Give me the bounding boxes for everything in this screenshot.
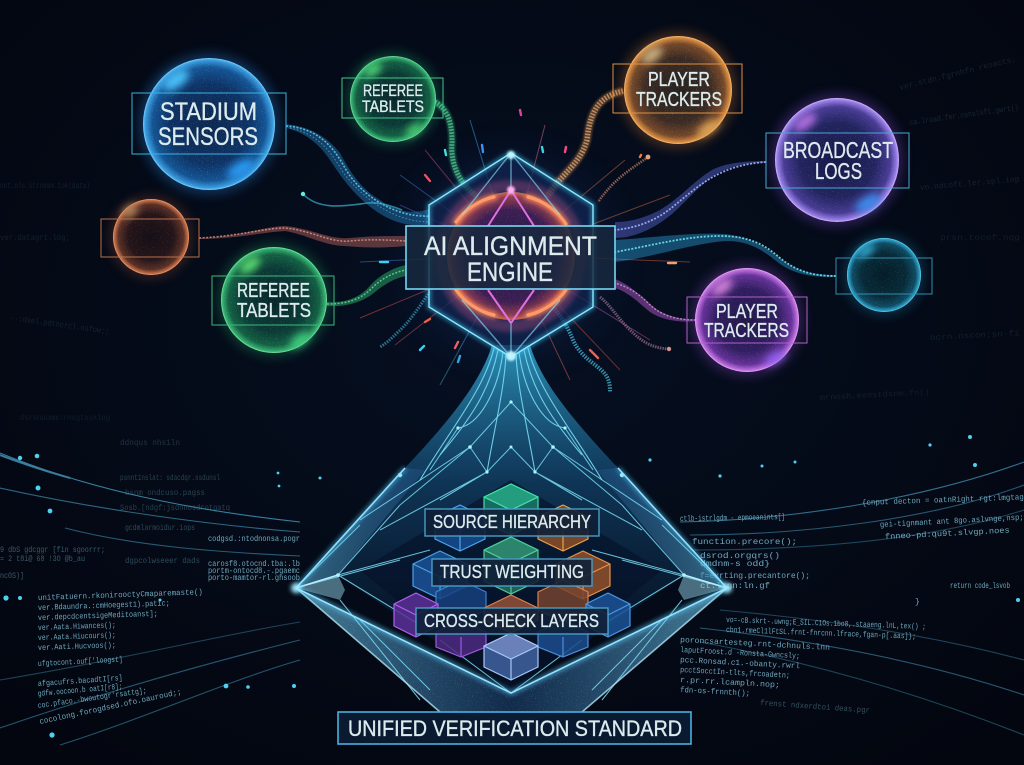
left code text: ver.Aata.Hiwances(); (38, 621, 116, 633)
cube blue low (538, 620, 588, 657)
left code text: porto-mamtor-rl.ghsoob (208, 574, 300, 583)
crystal fan lines (420, 348, 602, 480)
engine ring arcs (456, 197, 566, 315)
label: cross-check layers: CROSS-CHECK LAYERS (424, 610, 599, 631)
sphere: referee tablets left: TABLETS (237, 300, 311, 322)
sphere: stadium sensors: SENSORS (158, 123, 258, 151)
sphere: referee tablets top (342, 53, 443, 145)
sphere: player trackers right: PLAYER (716, 301, 778, 323)
right code text: fnneo-pd:qu9t.slvgp.noes (885, 526, 1010, 542)
engine label: AI ALIGNMENT (424, 231, 597, 261)
left code text: 9 dbS gdcggr [fin sgoorrr; (0, 546, 105, 555)
right code text: cbn1.rmeCl1lFtSL.frnt-fnrcnn.lfrace,fgan-p[.aas]}; (726, 626, 916, 642)
sphere: player trackers top (613, 32, 742, 148)
engine label (406, 226, 615, 289)
cube blue upper left (435, 505, 485, 551)
strand: lower left (380, 292, 430, 347)
right code text: r.pr.rr.lcampln.nop; (680, 676, 780, 690)
strand: player trackers top (547, 91, 623, 197)
left code text: carosf8.otocnd.tba:.lb (208, 560, 300, 569)
sphere: referee tablets left (212, 244, 334, 356)
left flowing light lines (0, 453, 300, 745)
left code text: unitFatuern.rkonirooctyCmaparemaste() (38, 588, 203, 603)
engine label: ENGINE (467, 257, 553, 287)
right code text: function.precore(); (692, 538, 797, 547)
strand: thin teal (301, 192, 402, 210)
crystal nodes (336, 400, 686, 577)
left code text: bsnm ondcuso.pagss (125, 489, 205, 498)
central glow (376, 120, 646, 390)
sparks (380, 110, 676, 362)
right code text: } (915, 598, 920, 607)
right code text: pcc.Ronsad.c1.-obanty.rwrl (680, 656, 800, 671)
sphere: player trackers top: PLAYER (648, 69, 710, 91)
left code text: portm-ontocd8.-.pgaemc (208, 567, 300, 576)
left code text: ver.Bdaundra.:cmHoegest1).patic; (38, 599, 170, 613)
left code text: cocolong.forogdsed.ofo.oauroud;; (39, 688, 182, 727)
cube blue mid far left (413, 551, 467, 599)
ai alignment engine core (406, 151, 615, 361)
cube purple left (394, 593, 438, 637)
strand: lower pink (600, 297, 671, 351)
right code text: pcctSocctIn-tlts,frcoadetn; (680, 666, 790, 681)
data strands (199, 91, 836, 392)
right code text: dsrod.orgqrs() (700, 552, 780, 561)
left code text: ufgtocont.ouf['loogst] (38, 656, 123, 669)
left code text: ddnqus nhs1ln (120, 439, 180, 448)
crystal central beam (510, 357, 512, 765)
left code text: ver.datagrt.log; (0, 234, 70, 243)
left code text: coc.pfaco.-bwoutogr'rsattg]; (37, 687, 147, 711)
left code text: Sosb.[ndgf:jsdnnosdrotgatq (120, 504, 230, 513)
sphere: stadium sensors: STADIUM (160, 98, 257, 126)
right code text: dmdnm-s odd} (700, 560, 770, 569)
sphere: player trackers right (687, 264, 807, 376)
right flowing light lines (680, 462, 1024, 735)
right code text: ct.lrgn:ln.gf (700, 582, 770, 591)
cube large bottom (484, 633, 538, 680)
cube blue mid (436, 580, 486, 622)
left code text: psnnt1nslat: sdacdqr.ssdunsl (120, 474, 220, 483)
left code text: gcdmlarmoidur.iops (125, 524, 195, 533)
sphere: small blue (836, 235, 932, 315)
cube blue right (586, 593, 630, 637)
strand: lower right (545, 300, 610, 392)
right code text: fdn-os-frnnth(); (680, 686, 750, 699)
strand: referee tablets top (435, 102, 478, 197)
right code text (680, 55, 1024, 716)
sphere: small orange (101, 196, 199, 278)
label: source hierarchy (425, 509, 599, 536)
sphere: stadium sensors (132, 54, 286, 194)
left code text: nc0S)] (0, 572, 24, 581)
right code text: vo=-cB.skrt-.uwng;E_SIL.C1Os.1bo8,.staaeng.lnL,tex() ; (726, 616, 926, 632)
left code text: dgpcolwseeer dads (125, 557, 200, 566)
left code text: ont.ols.strneam.tok(data) (0, 182, 90, 191)
right code text: mrnosh.eenstdsnm.fn() (820, 388, 930, 403)
right code text: f=exrting.precantore(); (700, 572, 810, 581)
crystal upper fan (296, 345, 727, 693)
funnel: verification crystal (291, 345, 732, 765)
cube purple low (436, 620, 486, 657)
verification cubes (394, 484, 630, 680)
data particles (3, 435, 1020, 738)
left code text: afgacufrs.bacadtI[rs] (38, 674, 123, 689)
sphere: referee tablets top: REFEREE (363, 82, 423, 100)
engine hexagon fill (429, 153, 593, 357)
left code text: ver.depcdcentsigeMeditoanst]; (38, 610, 158, 623)
engine ring (447, 192, 575, 320)
left code text: codgsd.:ntodnonsa.pogr (208, 535, 300, 544)
left code text: ver.Aati.Hucvoos(); (38, 641, 116, 653)
left code text: --:dsel.pdtncrcl.nsfow;; (10, 314, 110, 337)
sphere: player trackers top: TRACKERS (636, 89, 722, 111)
left code text: dsrsnuumm:rnsgtasklng (20, 414, 110, 423)
sphere: broadcast logs: BROADCAST (783, 137, 893, 163)
engine ring glow (441, 186, 581, 326)
cube orange low (484, 595, 538, 633)
sphere: broadcast logs (766, 94, 909, 226)
cube orange mid right (538, 580, 588, 622)
cube green top (484, 484, 538, 535)
right code text: ocrn.nscon;sn-fi (930, 329, 1020, 343)
right code text: laputFroost.d -Ronsta-Gwncsly; (680, 646, 800, 661)
right code text: vo.ndcoft.ler.spl.iop (919, 175, 1020, 193)
right code text: ver.stdn.fgrnhfn rkoacts; (899, 55, 1017, 93)
strand: player trackers right (615, 279, 696, 322)
right code text: prsn.tocof.nqg (940, 234, 1020, 243)
left code text: gdfw.oocoon.b oatI[r8]; (37, 683, 123, 699)
label: cross-check layers (416, 608, 608, 634)
cube green middle (484, 537, 538, 594)
strand: stadium sensors (286, 124, 430, 225)
strand: thin orange (598, 155, 650, 202)
cube orange upper right (538, 505, 588, 551)
label: source hierarchy: SOURCE HIERARCHY (433, 511, 591, 532)
label: unified verification standard: UNIFIED VERIFICATION STANDARD (348, 716, 682, 741)
crystal inner shade (360, 480, 662, 693)
strand: broadcast logs (615, 161, 766, 238)
bright crystal edges (296, 468, 727, 712)
radiating light rays (360, 120, 690, 385)
strand: small blue sphere (615, 234, 836, 277)
left code text (0, 182, 300, 727)
right code text: frenst ndxerdtoi deas.pgr (760, 699, 870, 716)
left code text: ver.Aata.Hiucours(); (38, 631, 116, 643)
crystal side facets (296, 468, 425, 588)
sphere: player trackers right: TRACKERS (704, 320, 789, 342)
engine hexagon lines (429, 153, 593, 357)
strand: referee tablets left (327, 265, 406, 306)
sphere: broadcast logs: LOGS (815, 158, 862, 184)
sphere: referee tablets top: TABLETS (362, 98, 424, 116)
left code text: = 2 t8i@ 68 !3O @b_au (0, 555, 85, 564)
crystal mesh (296, 402, 727, 700)
crystal lower speckle (296, 588, 511, 722)
strand: small orange sphere (199, 226, 406, 248)
label: trust weighting: TRUST WEIGHTING (440, 561, 584, 582)
right code text: ctlb-istrlgdm - epmoeanints[] (680, 513, 785, 524)
right code text: poroncsartesteg.rnt-dchnuls.lnn (680, 636, 830, 653)
cube orange mid far right (556, 551, 610, 599)
sphere: referee tablets left: REFEREE (237, 280, 310, 302)
label: trust weighting (432, 559, 592, 586)
